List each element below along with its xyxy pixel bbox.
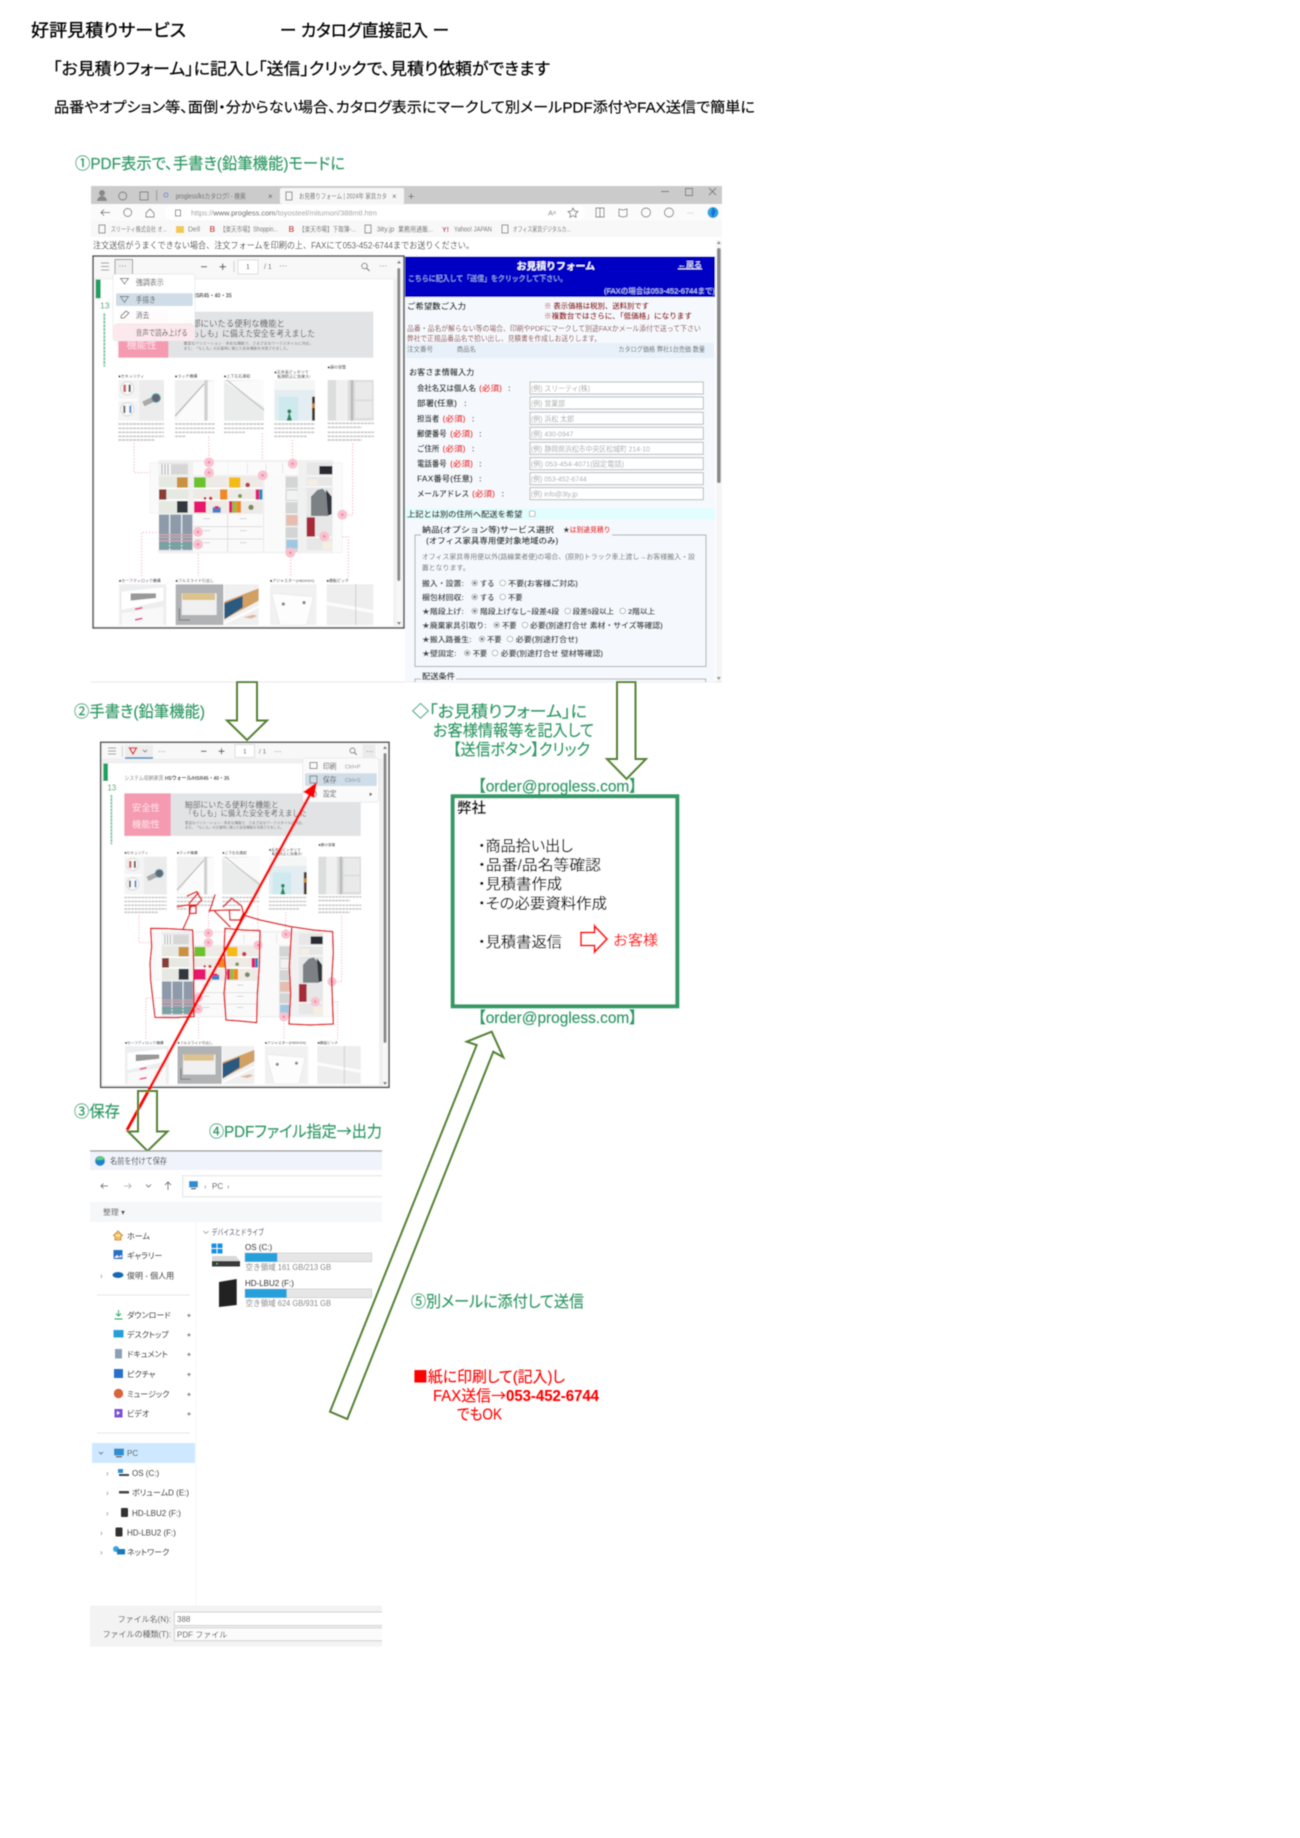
delivery conditions legend xyxy=(415,671,706,682)
browser tab bar: × xyxy=(268,192,273,201)
bookmarks bar: Y! xyxy=(442,227,449,234)
service options fieldset: 不要 xyxy=(473,649,487,658)
dialog navigation row: › xyxy=(227,1182,230,1191)
service options fieldset: ★廃棄家具引取り: xyxy=(422,621,487,630)
quantity section: カタログ価格 弊社1台売価 数量 xyxy=(618,344,705,354)
service options fieldset xyxy=(415,524,706,666)
catalog page texts 2: 「もしも」に備えた安全を考えました xyxy=(185,808,307,818)
PDF toolbar 2: ··· xyxy=(274,746,282,756)
catalog page texts 2: 機能性 xyxy=(132,818,160,829)
service options fieldset: 置となります。 xyxy=(422,564,470,572)
bookmarks bar: B xyxy=(210,225,216,234)
catalog page texts: ■天井高ピッタリで xyxy=(274,369,309,375)
delivery conditions legend: 配送条件 xyxy=(422,671,455,681)
catalog page texts: ■セーフティロック機構 xyxy=(119,577,161,583)
form header: こちらに記入して「送信」をクリックして下さい。 xyxy=(408,273,567,283)
bookmarks bar: Yahoo! JAPAN xyxy=(454,226,492,234)
customer info section: : xyxy=(479,460,482,469)
panel: PDF viewer with menu xyxy=(93,256,404,628)
processing list: ・品番/品名等確認 xyxy=(478,856,601,874)
dialog navigation pane: ピクチャ xyxy=(127,1370,155,1379)
service options fieldset: 必要(別途打合せ 壁材等確認) xyxy=(501,649,604,658)
catalog page texts 2: システム収納家具 HSウォール/HSR45・40・35 xyxy=(124,774,230,782)
catalog page texts: 安全性 xyxy=(127,321,157,334)
customer info section: 部署(任意) xyxy=(417,398,457,408)
quantity section xyxy=(406,300,714,358)
panel: PDF viewer with save menu and annotations xyxy=(101,742,389,1130)
dialog navigation pane: ネットワーク xyxy=(127,1548,169,1557)
catalog page texts: 豊富なバリエーション・多彩な機能で、さまざまなワークスタイルに対応。 xyxy=(184,341,313,346)
service options fieldset: ★階段上げ: xyxy=(422,607,464,616)
processing list: ・その必要資料作成 xyxy=(478,895,607,912)
catalog page texts: 機能性 xyxy=(127,338,157,351)
drives section: 空き領域 624 GB/931 GB xyxy=(246,1298,331,1308)
catalog page texts: 「もしも」に備えた安全を考えました xyxy=(184,328,315,338)
dialog navigation pane: › xyxy=(106,1488,109,1498)
arrow: viewer 1 to viewer 2 xyxy=(227,682,267,740)
dropdown menu: 強調表示 xyxy=(136,277,164,287)
red arrow to save xyxy=(127,782,317,1130)
drives section: HD-LBU2 (F:) xyxy=(245,1279,294,1288)
dropdown menu: 音声で読み上げる xyxy=(136,328,188,338)
step 4 heading: ④PDFファイル指定→出力 xyxy=(209,1118,382,1142)
service options fieldset: 不要 xyxy=(502,621,516,630)
service options fieldset: 梱包材回収: xyxy=(422,593,464,602)
dialog navigation pane: 俊明 - 個人用 xyxy=(127,1270,174,1280)
customer label: お客様 xyxy=(613,932,659,950)
quantity section: 商品名 xyxy=(457,344,476,354)
catalog page texts 2: ■セーフティロック機構 xyxy=(125,1040,164,1045)
form header: (FAXの場合は053-452-6744まで) xyxy=(604,286,716,296)
alternate address row: 上記とは別の住所へ配送を希望 xyxy=(407,509,522,519)
arrow: form to company xyxy=(607,682,646,779)
catalog page texts 2: ■扉の保管 xyxy=(318,842,336,847)
icon: OS drive xyxy=(212,1244,240,1266)
service options fieldset: 納品(オプション等)サービス選択 xyxy=(422,524,554,534)
dialog navigation pane: HD-LBU2 (F:) xyxy=(132,1509,181,1518)
PDF toolbar 2: / 1 xyxy=(259,748,267,756)
catalog page texts 2: ■アジャスター(H60/H24) xyxy=(265,1040,306,1045)
customer info section: (例) スリーティ(株) xyxy=(531,383,590,393)
alternate address row xyxy=(405,508,715,520)
quantity section: ご希望数ご入力 xyxy=(407,301,466,311)
file name footer: PDF ファイル xyxy=(177,1630,227,1640)
browser address bar: https://www.progless.com/toyosteel/mitumori/388mtl.htm xyxy=(191,208,377,218)
form callout heading: お客様情報等を記入して xyxy=(433,722,594,740)
service options fieldset: する xyxy=(480,593,494,602)
file name footer: 388 xyxy=(177,1615,191,1624)
service options fieldset: 不要 xyxy=(487,635,501,644)
dialog navigation pane: › xyxy=(100,1272,103,1280)
drives section: OS (C:) xyxy=(245,1243,272,1252)
dropdown menu: 消去 xyxy=(136,310,149,320)
icon: external HDD xyxy=(219,1279,237,1307)
dialog navigation pane: › xyxy=(100,1528,103,1538)
browser address bar xyxy=(91,204,722,221)
customer info section: (例) 053-454-4071(固定電話) xyxy=(531,459,624,469)
processing list xyxy=(478,838,607,951)
page scrollbar xyxy=(716,240,722,682)
customer info section: FAX番号(任意) xyxy=(417,474,473,484)
catalog page texts: ■棚板ピッチ xyxy=(327,577,349,583)
bookmarks bar: 【楽天市場】下取簿-... xyxy=(299,224,356,234)
save dropdown menu xyxy=(303,758,379,802)
dialog navigation pane: ✦ xyxy=(186,1332,192,1340)
sub lead text: 品番やオプション等、面倒・分からない場合、カタログ表示にマークして別メールPDF添付やFAX送信で簡単に xyxy=(54,98,755,116)
catalog page texts: ■ラッチ機構 xyxy=(175,372,197,378)
catalog page texts: ■扉の保管 xyxy=(328,363,346,369)
catalog page texts: また、「もしも」の災害時に備えた安全機能を充実させました。 xyxy=(184,346,290,351)
PDF toolbar: 1 xyxy=(246,264,250,271)
dialog navigation pane: ダウンロード xyxy=(127,1310,171,1320)
step 3 heading: ③保存 xyxy=(74,1103,120,1121)
service options fieldset: ★は別途見積り xyxy=(563,525,610,534)
customer info section: (例) info@3ty.jp xyxy=(531,489,578,499)
customer info section: : xyxy=(464,399,467,408)
dialog navigation row: 整理 ▾ xyxy=(103,1207,125,1217)
PDF toolbar: ··· xyxy=(279,262,287,270)
customer info section: (例) 053-452-6744 xyxy=(531,474,587,484)
catalog page texts 2: 細部にいたる便利な機能と xyxy=(185,799,279,809)
service options fieldset: 搬入・設置: xyxy=(422,579,464,588)
red arrow to customer xyxy=(581,926,607,952)
dropdown menu xyxy=(113,274,195,341)
bookmarks bar: 【楽天市場】Shoppin... xyxy=(220,224,278,234)
catalog page texts 2: ■天井高ピッタリで xyxy=(269,847,301,852)
customer info section: (例) 浜松 太郎 xyxy=(531,413,574,423)
dialog navigation pane: ホーム xyxy=(127,1232,150,1241)
catalog page artwork 2 xyxy=(103,763,379,1086)
dialog navigation pane: PC xyxy=(127,1449,138,1458)
dialog navigation pane: ✦ xyxy=(186,1351,192,1359)
processing list: ・見積書返信 xyxy=(478,934,562,951)
catalog page texts 2: 安全性 xyxy=(132,802,160,813)
service options fieldset: 段差5段以上 xyxy=(573,607,614,616)
dialog navigation row: PC xyxy=(212,1182,223,1191)
customer info section: : xyxy=(502,490,504,499)
dropdown menu: 手描き xyxy=(136,294,156,304)
dialog navigation pane: OS (C:) xyxy=(132,1469,159,1478)
catalog page texts: ■フルスライド引出し xyxy=(176,577,214,583)
panel: save-as dialog xyxy=(90,1151,382,1647)
catalog page texts: 細部にいたる便利な機能と xyxy=(184,319,285,329)
dialog navigation pane: HD-LBU2 (F:) xyxy=(127,1528,176,1538)
customer info section: 郵便番号 xyxy=(417,428,447,438)
bookmarks bar: 3ity.jp xyxy=(377,226,395,234)
PDF toolbar 2: ··· xyxy=(366,746,374,756)
drives section xyxy=(204,1227,372,1308)
drives section: 空き領域 161 GB/213 GB xyxy=(246,1262,331,1272)
PDF toolbar 2: 1 xyxy=(243,748,247,756)
dialog navigation pane: ✦ xyxy=(186,1391,192,1399)
dialog navigation pane: デスクトップ xyxy=(127,1330,169,1340)
PDF toolbar: ··· xyxy=(118,262,126,270)
customer info section: (必須) xyxy=(442,413,466,423)
catalog page texts 2 xyxy=(107,774,338,1045)
service options fieldset: 必要(別途打合せ) xyxy=(516,635,579,644)
processing list: ・商品拾い出し xyxy=(478,838,573,855)
dialog navigation pane: ボリュームD (E:) xyxy=(132,1488,189,1498)
bookmarks bar: 業務用通販... xyxy=(398,224,433,234)
service options fieldset: する xyxy=(480,579,494,588)
dialog title bar: 名前を付けて保存 xyxy=(110,1156,167,1166)
dialog navigation pane xyxy=(92,1222,196,1606)
bookmarks bar: スリーティ株式会社 オ... xyxy=(111,224,167,234)
bookmarks bar: オフィス家具デジタルカ... xyxy=(513,224,571,234)
customer info section: : xyxy=(479,475,482,484)
catalog page texts 2: 13 xyxy=(107,783,117,792)
customer info section: ご住所 xyxy=(417,443,439,453)
customer info section: (必須) xyxy=(479,383,502,393)
file name footer: ファイル名(N): xyxy=(118,1614,171,1624)
save dropdown menu: 印刷 xyxy=(323,761,336,771)
fax note: でもOK xyxy=(457,1406,503,1424)
browser address bar: ··· xyxy=(687,210,694,217)
save dropdown menu: 設定 xyxy=(323,790,336,799)
fax note xyxy=(413,1365,599,1424)
dialog navigation pane: ドキュメント xyxy=(127,1350,168,1359)
PDF toolbar 2: ··· xyxy=(158,746,166,756)
dialog navigation pane: ミュージック xyxy=(127,1390,169,1399)
catalog page texts 2: ■上下左右連結 xyxy=(222,850,247,855)
dialog navigation row: › xyxy=(204,1182,207,1191)
quantity section: 品番・品名が解らない等の場合、印刷やPDFにマークして別途FAXかメール添付で送って下さい xyxy=(407,323,701,333)
step 5 heading: ⑤別メールに添付して送信 xyxy=(411,1293,584,1311)
PDF scrollbar xyxy=(397,258,402,626)
form callout heading xyxy=(412,698,594,759)
catalog page texts: 13 xyxy=(100,300,110,310)
form callout heading: ◇「お見積りフォーム」に xyxy=(412,698,587,722)
bookmarks bar xyxy=(91,221,722,237)
title: 好評見積りサービス xyxy=(31,20,186,40)
catalog page texts: 転倒防止に効果大! xyxy=(277,373,310,379)
dialog title bar xyxy=(90,1151,382,1170)
dialog navigation pane: › xyxy=(106,1509,109,1518)
customer info section: (例) 静岡県浜松市中央区松城町 214-10 xyxy=(531,443,650,453)
dialog navigation pane: ✦ xyxy=(186,1312,192,1320)
catalog page texts: ■アジャスター(H60/H24) xyxy=(270,577,315,583)
dialog navigation row xyxy=(90,1176,382,1222)
catalog page texts: ■セキュリティ xyxy=(118,372,144,378)
save dropdown menu: 保存 xyxy=(323,774,336,784)
long arrow: send to company xyxy=(330,1032,503,1419)
form header xyxy=(405,256,716,297)
customer info section: (例) 営業部 xyxy=(531,398,565,408)
PDF toolbar: ··· xyxy=(379,262,387,270)
customer info section: 担当者 xyxy=(417,413,439,423)
dialog navigation pane: ギャラリー xyxy=(127,1252,162,1260)
catalog page texts 2: ■セキュリティ xyxy=(124,850,148,855)
service options fieldset: 2階以上 xyxy=(628,607,655,616)
customer info section: (必須) xyxy=(442,443,466,453)
processing list: ・見積書作成 xyxy=(478,876,562,893)
step 1 heading: ①PDF表示で、手書き(鉛筆機能)モードに xyxy=(75,155,345,173)
save dropdown menu: Ctrl+P xyxy=(345,764,361,770)
top email address: 【order@progless.com】 xyxy=(478,778,637,796)
lead text: 「お見積りフォーム」に記入し「送信」クリックで、見積り依頼ができます xyxy=(53,60,550,78)
PDF toolbar 2 xyxy=(102,744,388,758)
save dropdown menu: Ctrl+S xyxy=(345,778,361,784)
catalog page texts 2: また、「もしも」の災害時に備えた安全機能を充実させました。 xyxy=(185,825,284,830)
customer info section: (必須) xyxy=(472,489,495,499)
catalog page texts 2: 豊富なバリエーション・多彩な機能で、さまざまなワークスタイルに対応。 xyxy=(185,820,305,825)
file name footer xyxy=(90,1606,382,1647)
drives section: デバイスとドライブ xyxy=(212,1227,264,1237)
customer info section: : xyxy=(508,384,511,393)
catalog page artwork xyxy=(95,279,393,628)
box heading: 弊社 xyxy=(457,800,486,817)
subtitle: catalog direct entry: ー カタログ直接記入 ー xyxy=(280,22,449,40)
service options fieldset: ★壁固定: xyxy=(422,649,457,658)
fax note: ■紙に印刷して(記入)し xyxy=(413,1365,565,1387)
quantity section: ※ 表示価格は税別、送料別です xyxy=(544,300,649,310)
customer info section xyxy=(409,367,703,500)
bookmarks bar: Dell xyxy=(188,226,201,234)
panel: company processing box xyxy=(453,796,677,1006)
quantity section: 弊社で正規品番品名で拾い出し、見積書を作成しお送りします。 xyxy=(407,333,601,343)
quantity section: 注文番号 xyxy=(407,344,433,354)
browser tab bar: progless/ksカタログ/ - 検索 xyxy=(176,192,246,200)
browser tab bar: × xyxy=(392,192,397,201)
dialog navigation pane: ✦ xyxy=(186,1410,192,1418)
catalog page texts 2: ■棚板ピッチ xyxy=(317,1040,338,1045)
customer info section: (例) 430-0947 xyxy=(531,428,573,438)
service options fieldset: オフィス家具専用便以外(路線業者便)の場合、(原則)トラック車上渡し→お客様搬入・設 xyxy=(422,552,695,561)
catalog page texts xyxy=(100,290,349,583)
catalog page texts 2: ■ラッチ機構 xyxy=(177,850,198,855)
bookmarks bar: B xyxy=(288,225,294,234)
fax note: FAX送信→053-452-6744 xyxy=(433,1384,599,1406)
PDF toolbar: / 1 xyxy=(264,264,272,271)
hand-drawn red marks xyxy=(150,892,333,1025)
catalog page texts 2: ■フルスライド引出し xyxy=(177,1040,213,1045)
service options fieldset: 不要 xyxy=(508,593,522,602)
customer info section: : xyxy=(472,414,474,423)
customer info section: 電話番号 xyxy=(417,459,447,469)
customer info section: メールアドレス xyxy=(417,490,469,499)
file name footer: ファイルの種類(T): xyxy=(103,1629,171,1639)
dialog navigation pane: ビデオ xyxy=(127,1408,150,1418)
customer info section: (必須) xyxy=(450,428,473,438)
dialog navigation pane: › xyxy=(106,1469,109,1478)
catalog page texts 2: 転倒防止に効果大! xyxy=(272,851,302,856)
service options fieldset: ★搬入路養生: xyxy=(422,635,472,644)
customer info section: (必須) xyxy=(450,459,473,469)
catalog page texts: システム収納家具 HSウォール/HSR45・40・35 xyxy=(118,290,232,299)
browser tab bar xyxy=(91,186,722,204)
notice text: 注文送信がうまくできない場合、注文フォームを印刷の上、FAXにて053-452-6744までお送りください。 xyxy=(93,240,474,250)
panel: estimate form xyxy=(405,256,716,682)
service options fieldset: 不要(お客様ご対応) xyxy=(508,579,579,588)
form header: お見積りフォーム xyxy=(517,260,596,272)
quantity section: ※複数台ではさらに、「低価格」になります xyxy=(544,310,692,320)
customer info section: : xyxy=(472,444,474,453)
panel: browser screenshot xyxy=(91,186,722,682)
service options fieldset: (オフィス家具専用便対象地域のみ) xyxy=(426,536,559,546)
catalog page texts: ■上下左右連結 xyxy=(224,372,250,378)
browser tab bar: お見積りフォーム | 2024年 家具カタ xyxy=(299,192,387,200)
customer info section: 会社名又は個人名 xyxy=(417,383,476,393)
PDF scrollbar 2 xyxy=(383,744,388,1086)
browser tab bar: + xyxy=(408,191,414,203)
service options fieldset: 階段上げなし~段差4段 xyxy=(480,607,560,616)
bottom email address: 【order@progless.com】 xyxy=(478,1010,637,1027)
customer info section: : xyxy=(479,429,482,438)
dialog navigation pane: › xyxy=(100,1548,103,1557)
arrow: viewer 2 to save dialog xyxy=(128,1091,168,1151)
form header: ←戻る xyxy=(678,260,702,270)
dialog navigation pane: ✦ xyxy=(186,1371,192,1379)
form callout heading: 【送信ボタン】クリック xyxy=(453,741,590,759)
service options fieldset: 必要(別途打合せ 素材・サイズ等確認) xyxy=(530,621,663,630)
step 2 heading: ②手書き(鉛筆機能) xyxy=(74,703,205,721)
PDF toolbar xyxy=(94,257,403,278)
browser address bar: Aᵃ xyxy=(548,208,556,218)
customer info section: お客さま情報入力 xyxy=(409,367,474,377)
